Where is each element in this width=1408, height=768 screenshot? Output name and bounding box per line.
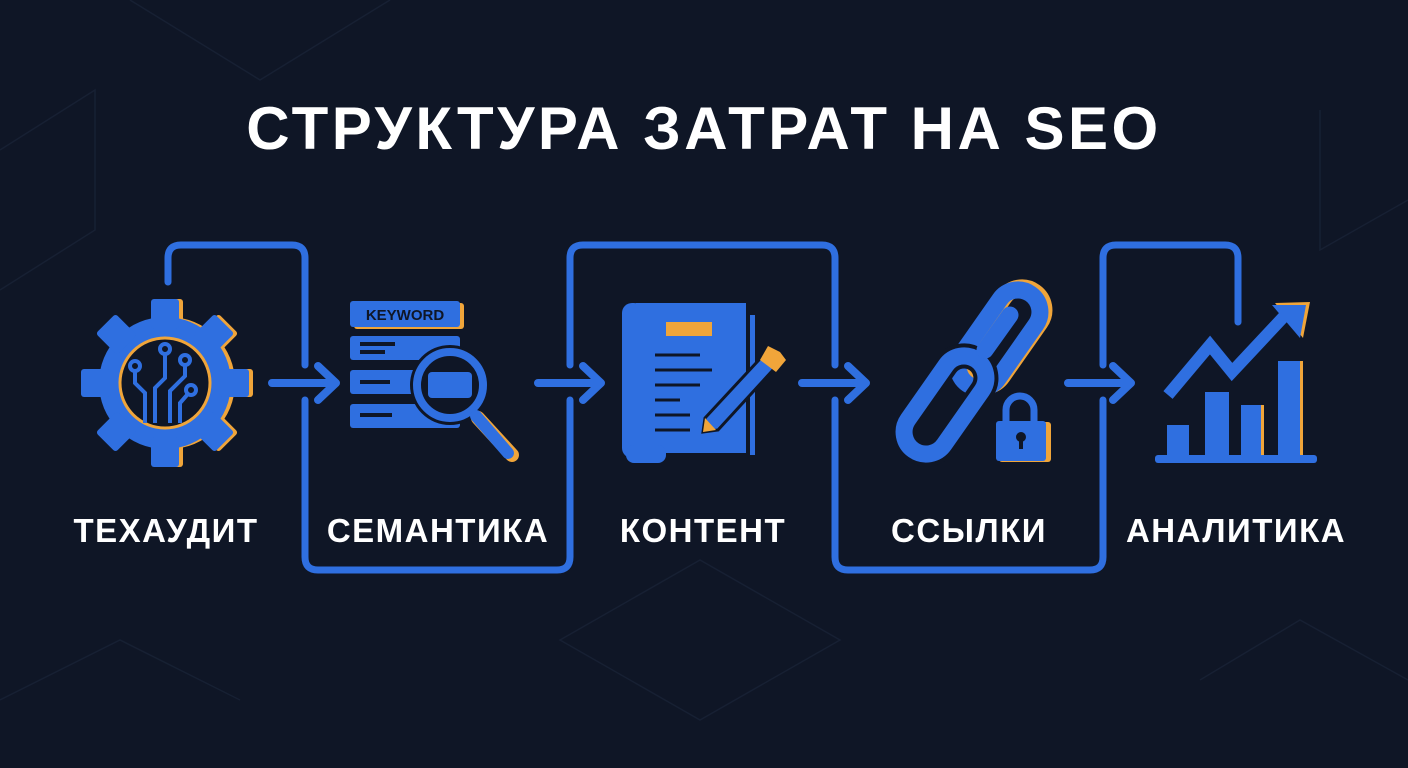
label: КОНТЕНТ: КОНТЕНТ (620, 512, 786, 549)
icon: gear (81, 299, 253, 467)
connector line (168, 245, 1238, 570)
icon: chain link with lock (895, 279, 1053, 463)
label: ССЫЛКИ: ССЫЛКИ (891, 512, 1047, 549)
arrow 4 (1068, 366, 1131, 400)
label: СЕМАНТИКА: СЕМАНТИКА (327, 512, 549, 549)
icon: growth chart (1155, 302, 1317, 463)
title: СТРУКТУРА ЗАТРАТ НА SEO (246, 95, 1162, 162)
arrow 2 (538, 366, 601, 400)
arrow 1 (272, 366, 336, 400)
arrow 3 (802, 366, 866, 400)
icon: document with pencil (622, 303, 786, 463)
icon: keyword search (350, 301, 512, 455)
label: АНАЛИТИКА: АНАЛИТИКА (1126, 512, 1346, 549)
icon: keyword search: KEYWORD (366, 307, 444, 324)
label: ТЕХАУДИТ: ТЕХАУДИТ (74, 512, 258, 549)
